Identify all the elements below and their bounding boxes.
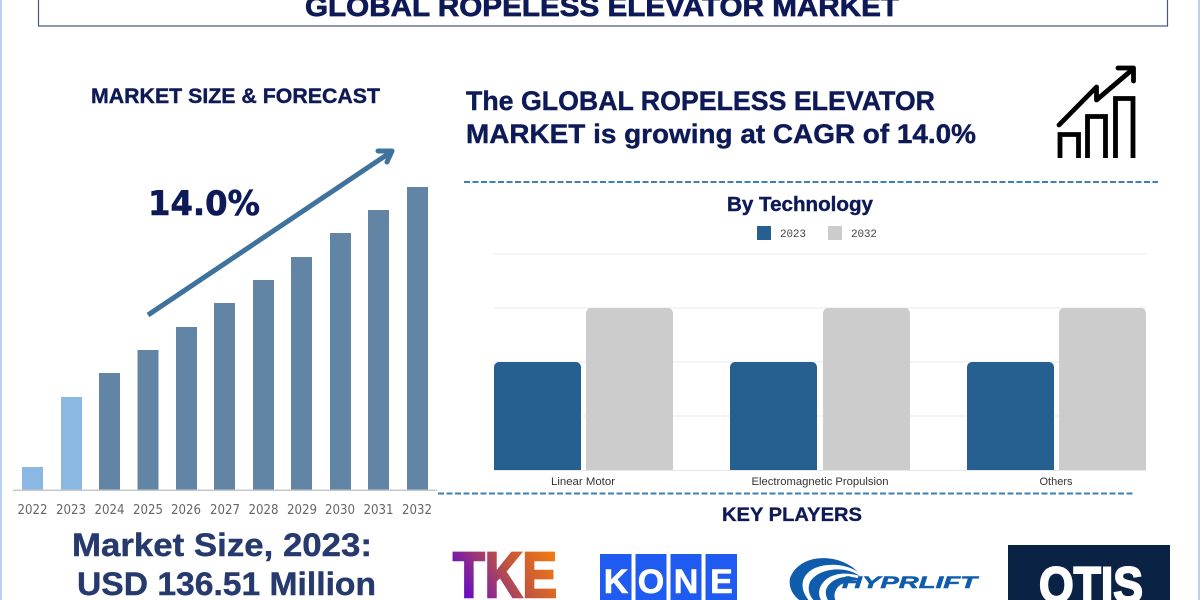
forecast bar chart: 2023 bbox=[56, 502, 86, 518]
forecast bar chart: 2027 bbox=[210, 502, 240, 518]
CAGR statement: MARKET is growing at CAGR of 14.0% bbox=[466, 119, 976, 149]
heading: market size and forecast: MARKET SIZE & FORECAST bbox=[91, 85, 380, 108]
group: electromagnetic propulsion: Electromagnetic Propulsion bbox=[752, 476, 888, 488]
logo: KONE: O bbox=[638, 563, 664, 600]
forecast bar chart: 2031 bbox=[364, 502, 394, 518]
heading: key players: KEY PLAYERS bbox=[722, 505, 862, 526]
market size callout bbox=[72, 527, 376, 600]
logo: OTIS bbox=[1008, 545, 1170, 600]
group: electromagnetic propulsion bbox=[730, 308, 910, 488]
group: linear motor: Linear Motor bbox=[551, 476, 615, 488]
technology bar chart bbox=[494, 254, 1146, 488]
chart legend bbox=[757, 226, 877, 241]
forecast bar chart bbox=[13, 187, 437, 518]
chart legend: 2023 bbox=[780, 229, 806, 241]
group: others: Others bbox=[1040, 476, 1073, 488]
logo: Hyprlift: HYPRLIFT bbox=[842, 573, 980, 592]
forecast bar chart: 2030 bbox=[325, 502, 355, 518]
title banner bbox=[38, 0, 1168, 26]
forecast bar chart: 2025 bbox=[133, 502, 163, 518]
icon: growth chart bbox=[1059, 68, 1134, 158]
heading: by technology: By Technology bbox=[727, 194, 874, 216]
logo: KONE: E bbox=[710, 563, 733, 600]
logo: Hyprlift bbox=[790, 558, 980, 600]
forecast bar chart: 2024 bbox=[94, 502, 124, 518]
CAGR statement: The GLOBAL ROPELESS ELEVATOR bbox=[466, 86, 935, 116]
CAGR statement bbox=[466, 86, 976, 149]
logo: KONE bbox=[600, 554, 737, 600]
logo: KONE: K bbox=[604, 563, 629, 600]
forecast bar chart: 2028 bbox=[248, 502, 278, 518]
group: linear motor bbox=[494, 308, 673, 488]
forecast bar chart: 2029 bbox=[287, 502, 317, 518]
growth arrow bbox=[148, 151, 392, 315]
forecast bar chart: 2022 bbox=[18, 502, 48, 518]
market size callout: Market Size, 2023: bbox=[72, 527, 372, 563]
chart legend: 2032 bbox=[851, 229, 877, 241]
forecast bar chart: 2026 bbox=[171, 502, 201, 518]
CAGR value: 14.0% bbox=[148, 184, 260, 224]
forecast bar chart: 2032 bbox=[402, 502, 432, 518]
group: others bbox=[967, 308, 1146, 488]
logo: KONE: N bbox=[674, 563, 698, 600]
